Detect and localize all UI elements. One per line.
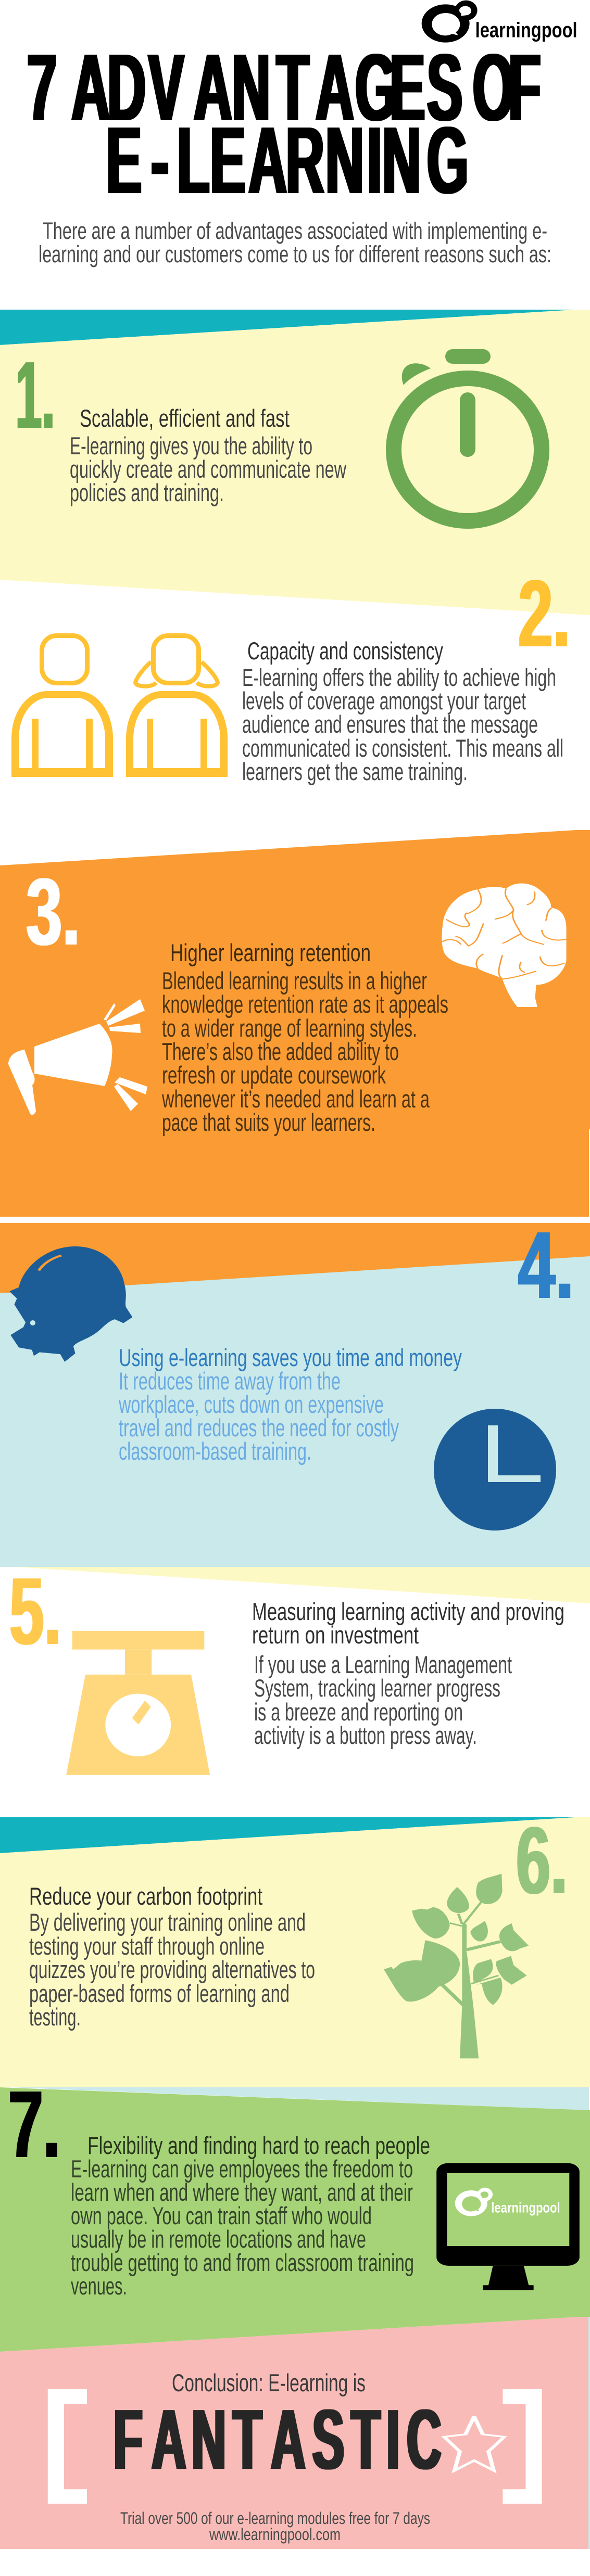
fantastic word: FANTASTIC xyxy=(114,2392,442,2488)
body text xyxy=(161,967,448,1136)
number 3: 3. xyxy=(26,858,80,965)
body text: to a wider range of learning styles. xyxy=(162,1014,417,1042)
body text: testing. xyxy=(29,2003,81,2031)
logo: learningpool white: learningpool xyxy=(491,2200,560,2216)
panel: 3 retention xyxy=(0,830,590,1217)
body text xyxy=(71,2155,414,2300)
icon: female learner xyxy=(126,636,228,777)
panel background xyxy=(0,2317,588,2549)
body text: testing your staff through online xyxy=(29,1932,265,1960)
panel background xyxy=(0,310,590,615)
body text: is a breeze and reporting on xyxy=(254,1698,463,1726)
icon: monitor xyxy=(436,2163,580,2290)
light blue wedge xyxy=(10,2087,589,2110)
trial text: www.learningpool.com xyxy=(209,2525,341,2544)
yellow wedge xyxy=(15,1567,590,1603)
title: E-LEARNING xyxy=(106,108,469,213)
panel background xyxy=(0,1256,590,1567)
brackets xyxy=(48,2389,542,2504)
body text: usually be in remote locations and have xyxy=(71,2225,366,2253)
trial text xyxy=(120,2509,430,2544)
body text: refresh or update coursework xyxy=(162,1061,386,1089)
icon: megaphone xyxy=(8,999,147,1115)
body text xyxy=(70,432,347,506)
icon: male learner xyxy=(11,636,113,777)
icon: stopwatch xyxy=(394,349,542,521)
body text: quizzes you’re providing alternatives to xyxy=(29,1956,315,1983)
body text: classroom-based training. xyxy=(119,1437,311,1465)
body text: It reduces time away from the xyxy=(119,1367,341,1395)
panel: 2 capacity xyxy=(11,560,570,785)
logo: learningpool xyxy=(422,1,578,43)
body text: trouble getting to and from classroom training xyxy=(71,2249,414,2276)
body text: travel and reduces the need for costly xyxy=(119,1414,399,1442)
body text xyxy=(118,1367,399,1465)
icon: clock xyxy=(434,1409,556,1531)
body text: activity is a button press away. xyxy=(254,1721,477,1749)
edge sliver xyxy=(588,2317,590,2549)
panel: 7 flexibility xyxy=(0,2071,590,2352)
body text: E-learning can give employees the freedom to xyxy=(71,2155,413,2183)
panel background xyxy=(0,2087,590,2352)
number 7: 7. xyxy=(8,2071,60,2177)
body text: quickly create and communicate new xyxy=(70,455,347,483)
icon: learners xyxy=(11,636,228,777)
orange wedge xyxy=(0,1223,590,1296)
icon: star xyxy=(444,2416,504,2470)
number 5: 5. xyxy=(9,1558,61,1664)
body text: workplace, cuts down on expensive xyxy=(118,1391,384,1418)
heading: Flexibility and finding hard to reach people xyxy=(87,2132,430,2159)
body text: pace that suits your learners. xyxy=(162,1108,375,1136)
heading: Capacity and consistency xyxy=(247,637,443,665)
icon: scales xyxy=(66,1631,210,1775)
body text xyxy=(29,1908,315,2031)
heading: Higher learning retention xyxy=(170,939,371,966)
heading: Scalable, efficient and fast xyxy=(80,404,290,432)
heading: Conclusion: E-learning is xyxy=(172,2369,366,2396)
panel background xyxy=(0,830,590,1217)
icon: brain xyxy=(442,884,567,1007)
body text xyxy=(254,1651,512,1749)
logo: learningpool white xyxy=(455,2188,560,2216)
panel: 5 measuring xyxy=(9,1558,590,1775)
body text: paper-based forms of learning and xyxy=(29,1980,290,2007)
body text: learners get the same training. xyxy=(242,758,468,785)
body text: venues. xyxy=(71,2272,127,2300)
title xyxy=(27,35,541,213)
body text: knowledge retention rate as it appeals xyxy=(162,990,448,1018)
body text: whenever it’s needed and learn at a xyxy=(161,1085,430,1113)
body text xyxy=(242,664,563,785)
panel: 6 carbon footprint xyxy=(0,1807,590,2087)
panel: 1 scalable: 1. xyxy=(16,341,55,448)
teal corner band xyxy=(0,310,575,345)
heading: Reduce your carbon footprint xyxy=(29,1882,262,1910)
body text: policies and training. xyxy=(70,479,224,506)
body text: E-learning gives you the ability to xyxy=(70,432,312,460)
heading: return on investment xyxy=(252,1621,419,1649)
icon: piggy bank xyxy=(9,1246,132,1362)
body text: There’s also the added ability to xyxy=(162,1038,399,1065)
icon: tree xyxy=(384,1873,529,2058)
teal corner band xyxy=(0,1817,575,1853)
body text: own pace. You can train staff who would xyxy=(71,2202,372,2229)
panel background xyxy=(0,1817,590,2087)
body text: By delivering your training online and xyxy=(29,1908,306,1936)
heading: Using e-learning saves you time and money xyxy=(119,1344,462,1371)
panel: conclusion xyxy=(0,2317,590,2549)
body text: Blended learning results in a higher xyxy=(162,967,427,994)
heading xyxy=(252,1598,564,1649)
title: 7 ADVANTAGES OF xyxy=(27,35,541,141)
panel: 4 time and money xyxy=(0,1212,590,1567)
trial text: Trial over 500 of our e-learning modules free for 7 days xyxy=(120,2509,430,2528)
panel: 1 scalable xyxy=(0,310,590,615)
body text: learn when and where they want, and at their xyxy=(71,2178,413,2206)
intro text xyxy=(39,218,551,267)
